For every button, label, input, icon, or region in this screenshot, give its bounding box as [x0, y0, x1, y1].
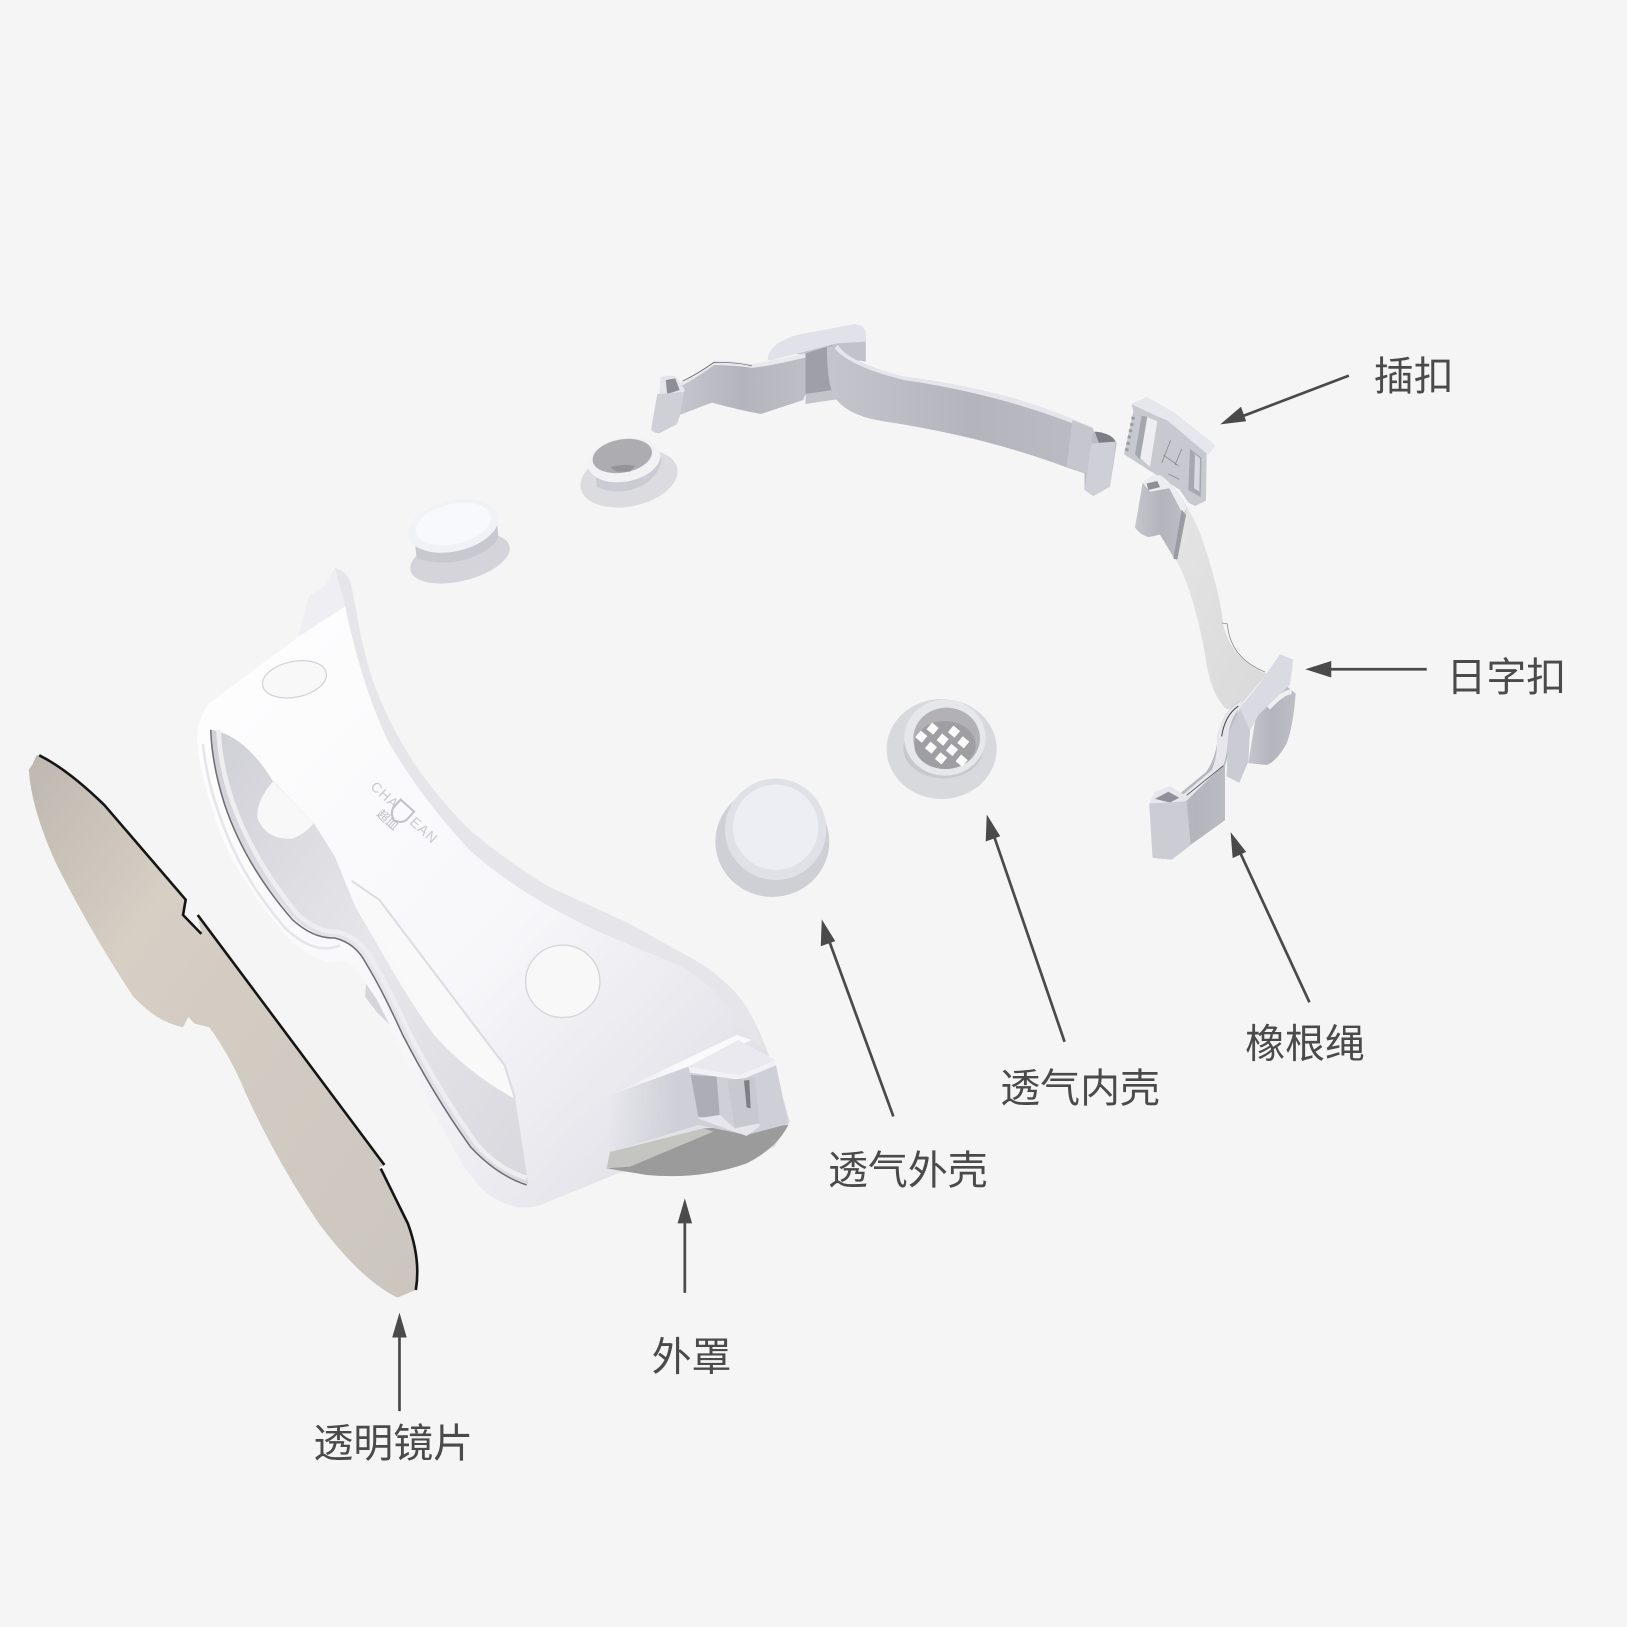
arrow and label: elastic cord	[1231, 832, 1365, 1066]
brand logo on shell: EAN	[407, 814, 441, 847]
recess behind buckle plate	[792, 335, 866, 362]
side face	[610, 1060, 788, 1152]
light band	[1160, 476, 1267, 710]
arrow and label: vent inner shell: 透气内壳	[1000, 1067, 1160, 1111]
interior of goggle	[212, 730, 528, 1184]
left strap section	[680, 355, 806, 415]
brand logo on shell: CHA	[368, 778, 403, 812]
arrow and label: elastic cord: 橡根绳	[1245, 1022, 1365, 1066]
brand logo on shell: 超皿	[374, 806, 402, 833]
vent inner shell with mesh, lower	[887, 699, 997, 799]
vent outer cap, lower	[715, 779, 829, 897]
main band	[827, 345, 1117, 496]
arrow and label: buckle: 插扣	[1374, 355, 1454, 399]
buckle centre bar	[806, 345, 832, 398]
see-through openings	[257, 781, 314, 839]
arrow and label: outer shell	[652, 1198, 731, 1380]
top end loop	[1135, 475, 1187, 560]
insert buckle	[1124, 397, 1215, 506]
buckle plate	[1227, 654, 1293, 783]
arrow and label: outer shell: 外罩	[652, 1336, 731, 1380]
vent inner shell, upper	[575, 432, 683, 516]
transparent lens	[29, 755, 417, 1298]
rear loop	[1248, 686, 1296, 765]
upper elastic strap with tension buckle	[651, 324, 1117, 496]
arrow and label: slider buckle: 日字扣	[1446, 656, 1566, 700]
brand logo on shell	[357, 778, 441, 859]
flange strip on upper edge	[335, 568, 764, 1050]
end loop	[659, 376, 685, 399]
lower dome	[607, 1125, 788, 1176]
lower elastic strap with loop buckle	[1135, 475, 1296, 860]
arrow and label: vent inner shell	[986, 815, 1160, 1111]
side clip and lower shell	[607, 1035, 788, 1176]
buckle plate	[768, 324, 866, 361]
vent outer cap, upper	[403, 491, 515, 593]
arrow and label: transparent lens: 透明镜片	[313, 1422, 473, 1466]
bottom strap	[1149, 701, 1240, 860]
gasket rim	[211, 730, 527, 1185]
nose knob	[365, 984, 390, 1025]
arrow and label: transparent lens	[313, 1313, 473, 1466]
vent holes	[259, 655, 330, 703]
gasket lip	[219, 730, 527, 1178]
arrow and label: vent outer shell	[821, 919, 988, 1193]
arrow and label: vent outer shell: 透气外壳	[828, 1149, 988, 1193]
arrow and label: buckle	[1220, 355, 1454, 424]
arrow and label: slider buckle	[1305, 656, 1566, 700]
outer shell	[197, 568, 790, 1208]
